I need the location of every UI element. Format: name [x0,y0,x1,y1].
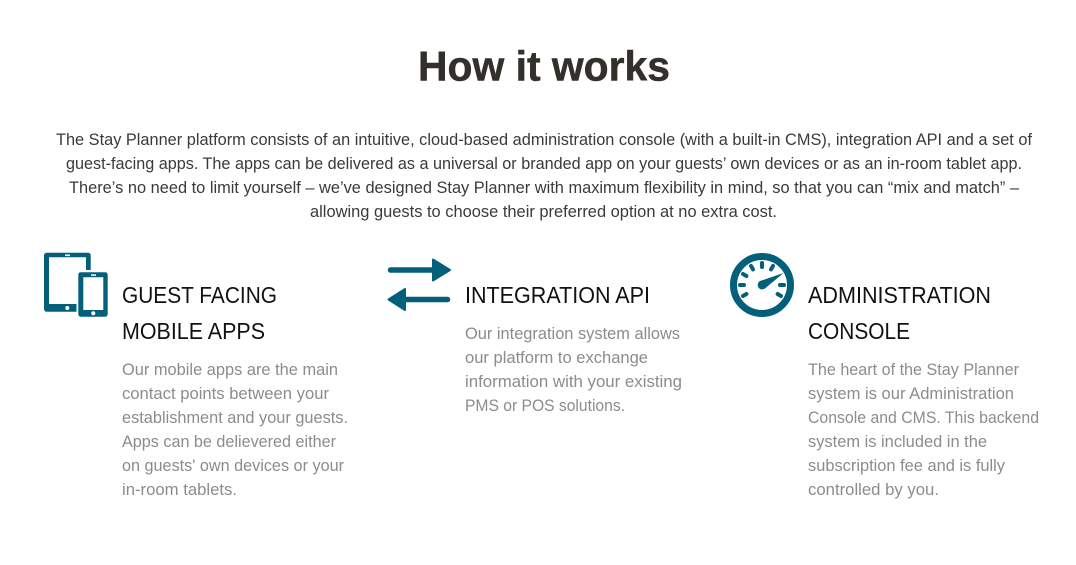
heading: integration api: INTEGRATION API [465,282,650,308]
text: guest facing description: establishment and your guests. [122,409,348,427]
panel: guest facing mobile apps [44,253,348,499]
icon: speedometer [734,256,790,314]
icon: tablet and phone [44,253,108,317]
text: guest facing description [122,361,348,499]
intro paragraph: There’s no need to limit yourself – we’ve designed Stay Planner with maximum flexibility in mind, so that you can “mix and match” – [69,179,1020,197]
text: guest facing description: in-room tablets. [122,481,237,499]
text: integration description: our platform to exchange [465,349,648,367]
text: integration description: information with your existing [465,373,682,391]
text: administration description: system is our Administration [808,385,1014,403]
intro paragraph: allowing guests to choose their preferred option at no extra cost. [310,203,777,221]
text: administration description: Console and CMS. This backend [808,409,1039,427]
icon: two-way arrows [388,260,450,310]
text: administration description: subscription fee and is fully [808,457,1006,475]
text: administration description: system is included in the [808,433,987,451]
heading: administration console [808,282,991,344]
heading: administration console: CONSOLE [808,318,910,344]
text: guest facing description: contact points between your [122,385,330,403]
intro paragraph [56,131,1032,221]
intro paragraph: The Stay Planner platform consists of an intuitive, cloud-based administration console (with a built-in CMS), integration API and a set of [56,131,1032,149]
heading: guest facing mobile apps [122,282,277,344]
text: guest facing description: on guests' own devices or your [122,457,344,475]
intro paragraph: guest-facing apps. The apps can be delivered as a universal or branded app on your guests’ own devices or as an in-room tablet app. [66,155,1022,173]
panel: integration api [388,260,682,415]
text: guest facing description: Our mobile apps are the main [122,361,338,379]
heading: guest facing mobile apps: GUEST FACING [122,282,277,308]
text: guest facing description: Apps can be delievered either [122,433,336,451]
title: How it works [418,42,670,90]
heading: guest facing mobile apps: MOBILE APPS [122,318,265,344]
text: administration description [808,361,1039,499]
text: administration description: The heart of the Stay Planner [808,361,1019,379]
text: integration description: PMS or POS solutions. [465,397,625,415]
text: integration description: Our integration system allows [465,325,680,343]
heading: administration console: ADMINISTRATION [808,282,991,308]
text: integration description [465,325,682,415]
text: administration description: controlled by you. [808,481,939,499]
panel: administration console [734,256,1039,499]
